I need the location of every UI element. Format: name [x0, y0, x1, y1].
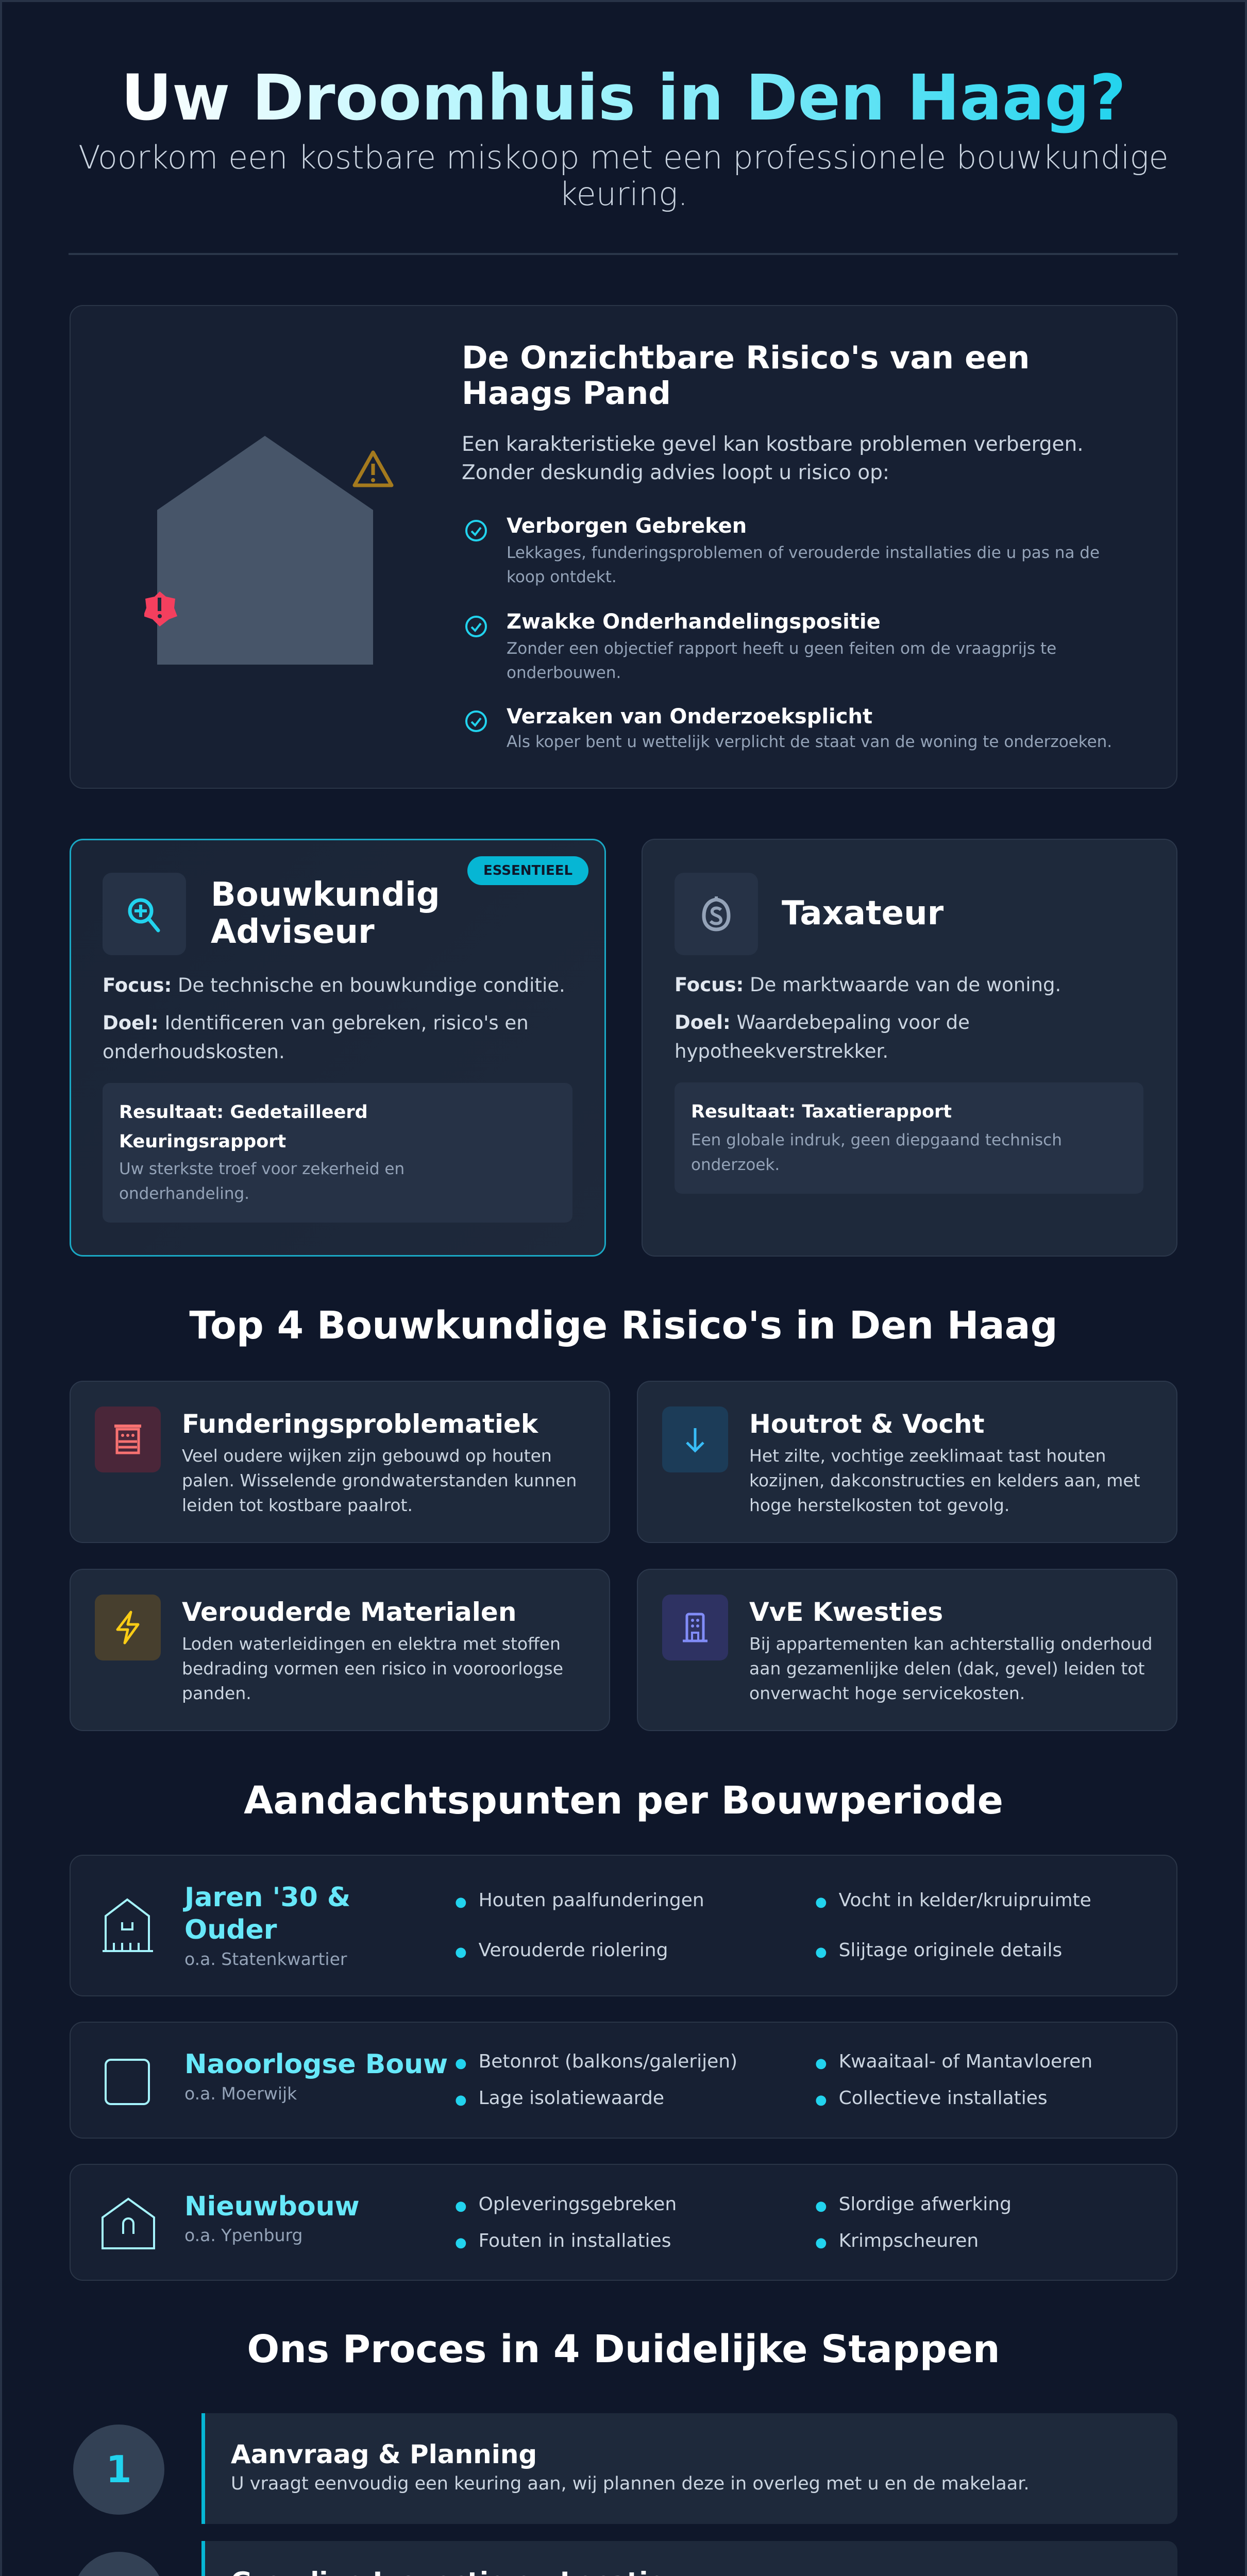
- heading: Bouwkundig: [211, 876, 440, 914]
- result box: Resultaat: Taxatierapport: [691, 1101, 952, 1122]
- period card: nieuwbouw: Nieuwbouw: [184, 2191, 360, 2222]
- item: onderzoeksplicht: Verzaken van Onderzoeksplicht: [507, 705, 872, 728]
- heading: [211, 876, 440, 951]
- icon: red alert badge: [143, 591, 177, 626]
- risk card: funderingsproblematiek: Funderingsproblematiek: [182, 1409, 538, 1439]
- period card: naoorlogse bouw: ● Betonrot (balkons/galerijen): [455, 2051, 737, 2072]
- icon: magnifier: [103, 873, 186, 955]
- period card: naoorlogse bouw: Naoorlogse Bouw: [184, 2049, 448, 2080]
- result box: [103, 1083, 572, 1223]
- risk card: houtrot & vocht: Het zilte, vochtige zeeklimaat tast houten kozijnen, dakconstructies en kelders aan, met hoge herstelkosten tot gevolg.: [749, 1446, 1140, 1515]
- period card: jaren 30: o.a. Statenkwartier: [184, 1949, 347, 1969]
- risk card: houtrot & vocht: [637, 1381, 1177, 1543]
- item: onderzoeksplicht: Als koper bent u wettelijk verplicht de staat van de woning te onderzoeken.: [507, 733, 1112, 751]
- period card: jaren 30: ● Verouderde riolering: [455, 1940, 668, 1961]
- period card: jaren 30: ● Houten paalfunderingen: [455, 1890, 704, 1911]
- period card: jaren 30: ● Slijtage originele details: [815, 1940, 1062, 1961]
- icon: warning triangle: [355, 452, 392, 485]
- item: verborgen gebreken: Verborgen Gebreken: [507, 514, 747, 538]
- result box: Uw sterkste troef voor zekerheid en onderhandeling.: [119, 1160, 405, 1203]
- panel: taxateur: [642, 839, 1177, 1257]
- badge: essentieel: [467, 856, 588, 885]
- period card: naoorlogse bouw: ● Collectieve installaties: [815, 2088, 1048, 2109]
- period card: nieuwbouw: [70, 2164, 1177, 2281]
- risk card: vve kwesties: VvE Kwesties: [749, 1597, 943, 1627]
- period card: jaren 30: [70, 1855, 1177, 1996]
- risk card: verouderde materialen: [70, 1569, 610, 1731]
- period card: nieuwbouw: ● Opleveringsgebreken: [455, 2194, 677, 2215]
- badge: essentieel: ESSENTIEEL: [483, 863, 572, 878]
- risk card: funderingsproblematiek: [70, 1381, 610, 1543]
- risk card: vve kwesties: Bij appartementen kan achterstallig onderhoud aan gezamenlijke delen (dak, gevel) leiden tot onverwacht hoge servicekosten.: [749, 1634, 1152, 1703]
- heading: Adviseur: [211, 913, 375, 951]
- risk card: verouderde materialen: Loden waterleidingen en elektra met stoffen bedrading vormen een risico in vooroorlogse panden.: [182, 1634, 563, 1703]
- item: verborgen gebreken: [465, 514, 1100, 586]
- heading: Taxateur: [782, 894, 943, 933]
- risk card: funderingsproblematiek: Veel oudere wijken zijn gebouwd op houten palen. Wisselende grondwaterstanden kunnen leiden tot kostbare paalrot.: [182, 1446, 577, 1515]
- risk card: houtrot & vocht: Houtrot & Vocht: [749, 1409, 984, 1439]
- period card: nieuwbouw: ● Krimpscheuren: [815, 2230, 979, 2251]
- text: focus/doel: Focus: De marktwaarde van de woning. Doel: Waardebepaling voor de hypotheekverstrekker.: [675, 974, 1061, 1062]
- period card: naoorlogse bouw: [70, 2022, 1177, 2139]
- heading: onzichtbare risico's: De Onzichtbare Risico's van een Haags Pand: [462, 340, 1030, 412]
- heading: top 4 risico's: Top 4 Bouwkundige Risico's in Den Haag: [189, 1303, 1058, 1348]
- icon: money: [675, 873, 758, 955]
- subtitle: Voorkom een kostbare miskoop met een professionele bouwkundige keuring.: [78, 139, 1169, 213]
- panel: bouwkundig adviseur: [70, 839, 606, 1257]
- step 1: Aanvraag & Planning: [231, 2439, 537, 2469]
- period card: naoorlogse bouw: ● Kwaaitaal- of Mantavloeren: [815, 2051, 1092, 2072]
- list: risks: [465, 514, 1112, 751]
- item: zwakke onderhandelingspositie: Zwakke Onderhandelingspositie: [507, 610, 881, 634]
- period card: nieuwbouw: ● Fouten in installaties: [455, 2230, 671, 2251]
- risk card: verouderde materialen: Verouderde Materialen: [182, 1597, 516, 1627]
- text: focus/doel: Focus: De technische en bouwkundige conditie. Doel: Identificeren van gebreken, risico's en onderhoudskosten.: [103, 974, 565, 1063]
- item: onderzoeksplicht: [465, 705, 1112, 751]
- text: intro: Een karakteristieke gevel kan kostbare problemen verbergen. Zonder deskundig advies loopt u risico op:: [462, 433, 1084, 484]
- period card: nieuwbouw: ● Slordige afwerking: [815, 2194, 1012, 2215]
- item: verborgen gebreken: Lekkages, funderingsproblemen of verouderde installaties die u pas na de koop ontdekt.: [507, 544, 1100, 586]
- step 1: U vraagt eenvoudig een keuring aan, wij plannen deze in overleg met u en de makelaar.: [231, 2473, 1030, 2494]
- period card: jaren 30: ● Vocht in kelder/kruipruimte: [815, 1890, 1091, 1911]
- period card: jaren 30: Jaren '30 & Ouder: [184, 1882, 350, 1945]
- title: Uw Droomhuis in Den Haag?: [121, 61, 1126, 134]
- heading: proces: Ons Proces in 4 Duidelijke Stappen: [247, 2327, 1000, 2371]
- heading: bouwperiode: Aandachtspunten per Bouwperiode: [244, 1778, 1003, 1823]
- step 1: [73, 2413, 1177, 2524]
- result box: Een globale indruk, geen diepgaand technisch onderzoek.: [691, 1131, 1062, 1174]
- illustration: house with warnings: [144, 436, 394, 665]
- period card: nieuwbouw: o.a. Ypenburg: [184, 2225, 302, 2245]
- period card: naoorlogse bouw: o.a. Moerwijk: [184, 2083, 297, 2104]
- item: zwakke onderhandelingspositie: Zonder een objectief rapport heeft u geen feiten om de vraagprijs te onderbouwen.: [507, 639, 1056, 682]
- step 1: 1: [106, 2448, 132, 2491]
- step 2: [78, 2541, 1177, 2576]
- result box: Resultaat: Gedetailleerd Keuringsrapport: [119, 1102, 368, 1152]
- period card: naoorlogse bouw: ● Lage isolatiewaarde: [455, 2088, 664, 2109]
- risk card: vve kwesties: [637, 1569, 1177, 1731]
- item: zwakke onderhandelingspositie: [465, 610, 1056, 682]
- panel: hidden risks: [70, 305, 1177, 789]
- result box: [675, 1082, 1143, 1194]
